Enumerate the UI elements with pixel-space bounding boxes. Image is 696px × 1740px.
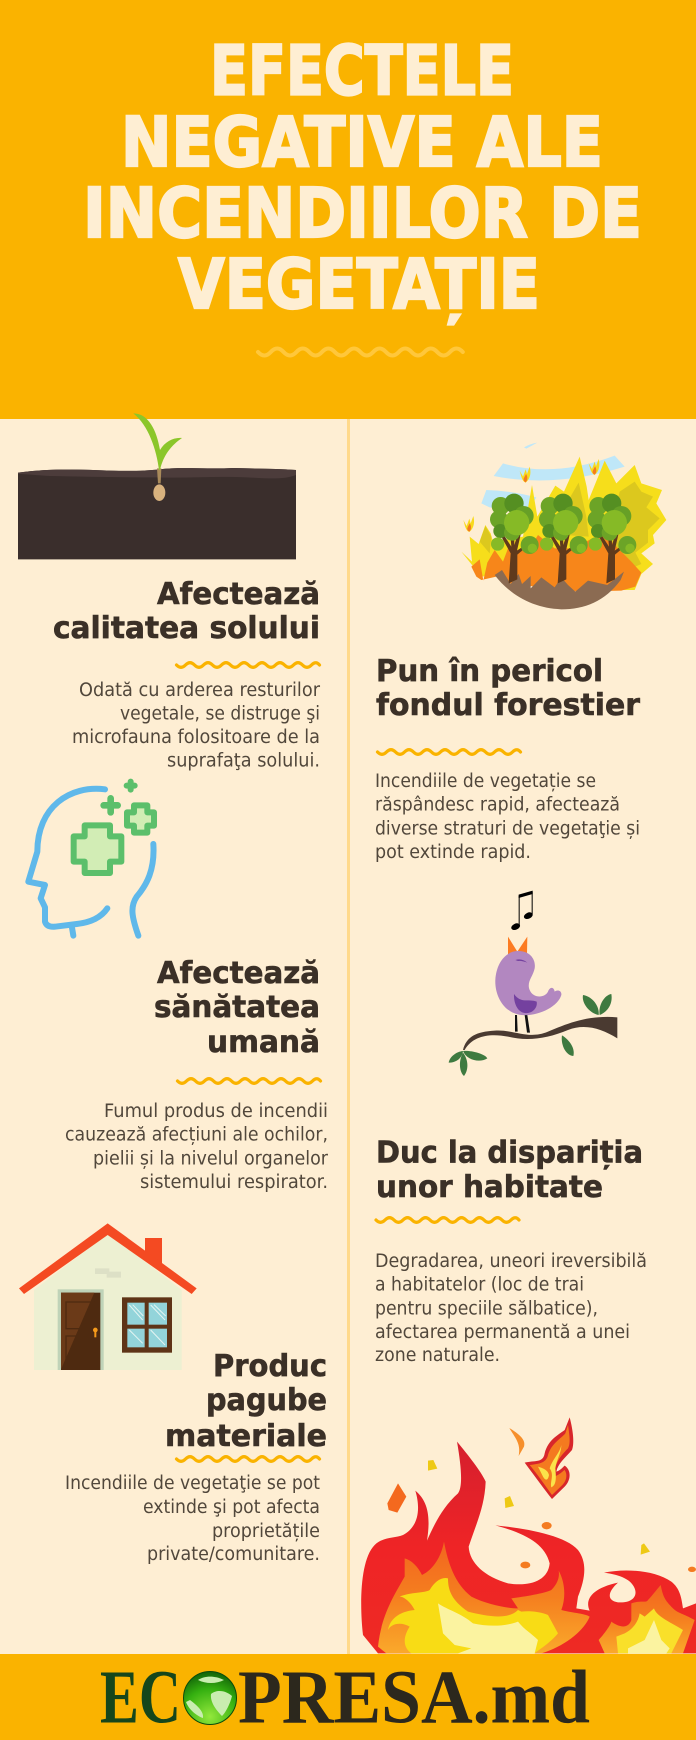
footer band <box>0 1654 696 1740</box>
logo: ECOPRESA.md: EC <box>100 1656 181 1740</box>
text: human health: Fumul produs de incendii <box>104 1101 328 1122</box>
icon: singing bird on branch <box>449 891 617 1076</box>
heading: human health <box>154 956 320 1060</box>
text: human health: cauzează afecțiuni ale ochilor, <box>65 1125 328 1146</box>
text: human health: pielii și la nivelul organelor <box>93 1149 328 1170</box>
panel: soil quality <box>18 413 320 772</box>
heading: human health: Afectează <box>157 956 320 991</box>
title: INCENDIILOR DE <box>83 174 642 254</box>
text: forest fund: diverse straturi de vegetaţie și <box>375 819 640 840</box>
heading: habitats <box>376 1136 643 1205</box>
heading: forest fund <box>376 654 640 723</box>
heading: soil quality <box>53 577 320 646</box>
panel: forest fund <box>375 443 666 863</box>
icon: soil and sprout <box>18 413 296 559</box>
logo: ECOPRESA.md: PRESA.md <box>238 1656 590 1740</box>
text: soil quality: suprafaţa solului. <box>167 750 320 772</box>
heading: human health: sănătatea <box>154 990 320 1025</box>
icon: house <box>19 1223 197 1370</box>
heading: material damage <box>165 1349 327 1454</box>
text: material damage: private/comunitare. <box>147 1544 320 1565</box>
heading: forest fund: Pun în pericol <box>376 654 603 689</box>
text: material damage: proprietățile <box>212 1521 320 1542</box>
text: material damage: extinde şi pot afecta <box>143 1497 320 1518</box>
text: habitats <box>375 1251 647 1366</box>
text: habitats: afectarea permanentă a unei <box>375 1322 630 1343</box>
text: habitats: pentru speciile sălbatice), <box>375 1299 598 1320</box>
title: EFECTELE <box>210 32 514 112</box>
title: VEGETAȚIE <box>178 245 540 325</box>
text: soil quality: microfauna folositoare de la <box>72 727 320 748</box>
heading: habitats: Duc la dispariția <box>376 1136 643 1171</box>
text: habitats: Degradarea, uneori ireversibilă <box>375 1251 647 1272</box>
text: habitats: a habitatelor (loc de trai <box>375 1275 584 1296</box>
heading: material damage: materiale <box>165 1419 327 1454</box>
heading: human health: umană <box>207 1025 320 1060</box>
text: human health <box>65 1101 328 1193</box>
panel: human health <box>28 782 328 1193</box>
text: forest fund: pot extinde rapid. <box>375 842 531 863</box>
heading: forest fund: fondul forestier <box>376 688 640 723</box>
text: forest fund <box>375 771 640 863</box>
title: NEGATIVE ALE <box>121 103 603 183</box>
illustration: flames <box>361 1417 696 1653</box>
text: soil quality: Odată cu arderea resturilor <box>79 680 320 701</box>
panel: material damage <box>19 1223 327 1565</box>
text: material damage: Incendiile de vegetaţie se pot <box>65 1473 320 1494</box>
text: human health: sistemului respirator. <box>140 1172 328 1193</box>
heading: soil quality: Afectează <box>157 577 320 612</box>
text: material damage <box>65 1473 320 1565</box>
text: habitats: zone naturale. <box>375 1345 500 1366</box>
title <box>83 32 642 325</box>
text: soil quality <box>72 680 320 772</box>
heading: soil quality: calitatea solului <box>53 611 320 646</box>
icon: burning forest <box>461 443 666 609</box>
heading: habitats: unor habitate <box>376 1170 603 1205</box>
header band <box>0 0 696 419</box>
logo: ECOPRESA.md <box>100 1656 590 1740</box>
icon: head with medical crosses <box>28 782 154 936</box>
text: forest fund: Incendiile de vegetație se <box>375 771 596 792</box>
heading: material damage: Produc <box>213 1349 327 1384</box>
text: soil quality: vegetale, se distruge şi <box>120 704 320 725</box>
panel: habitats <box>375 891 647 1366</box>
text: forest fund: răspândesc rapid, afectează <box>375 795 620 816</box>
icon: globe <box>184 1672 236 1724</box>
heading: material damage: pagube <box>206 1383 327 1418</box>
